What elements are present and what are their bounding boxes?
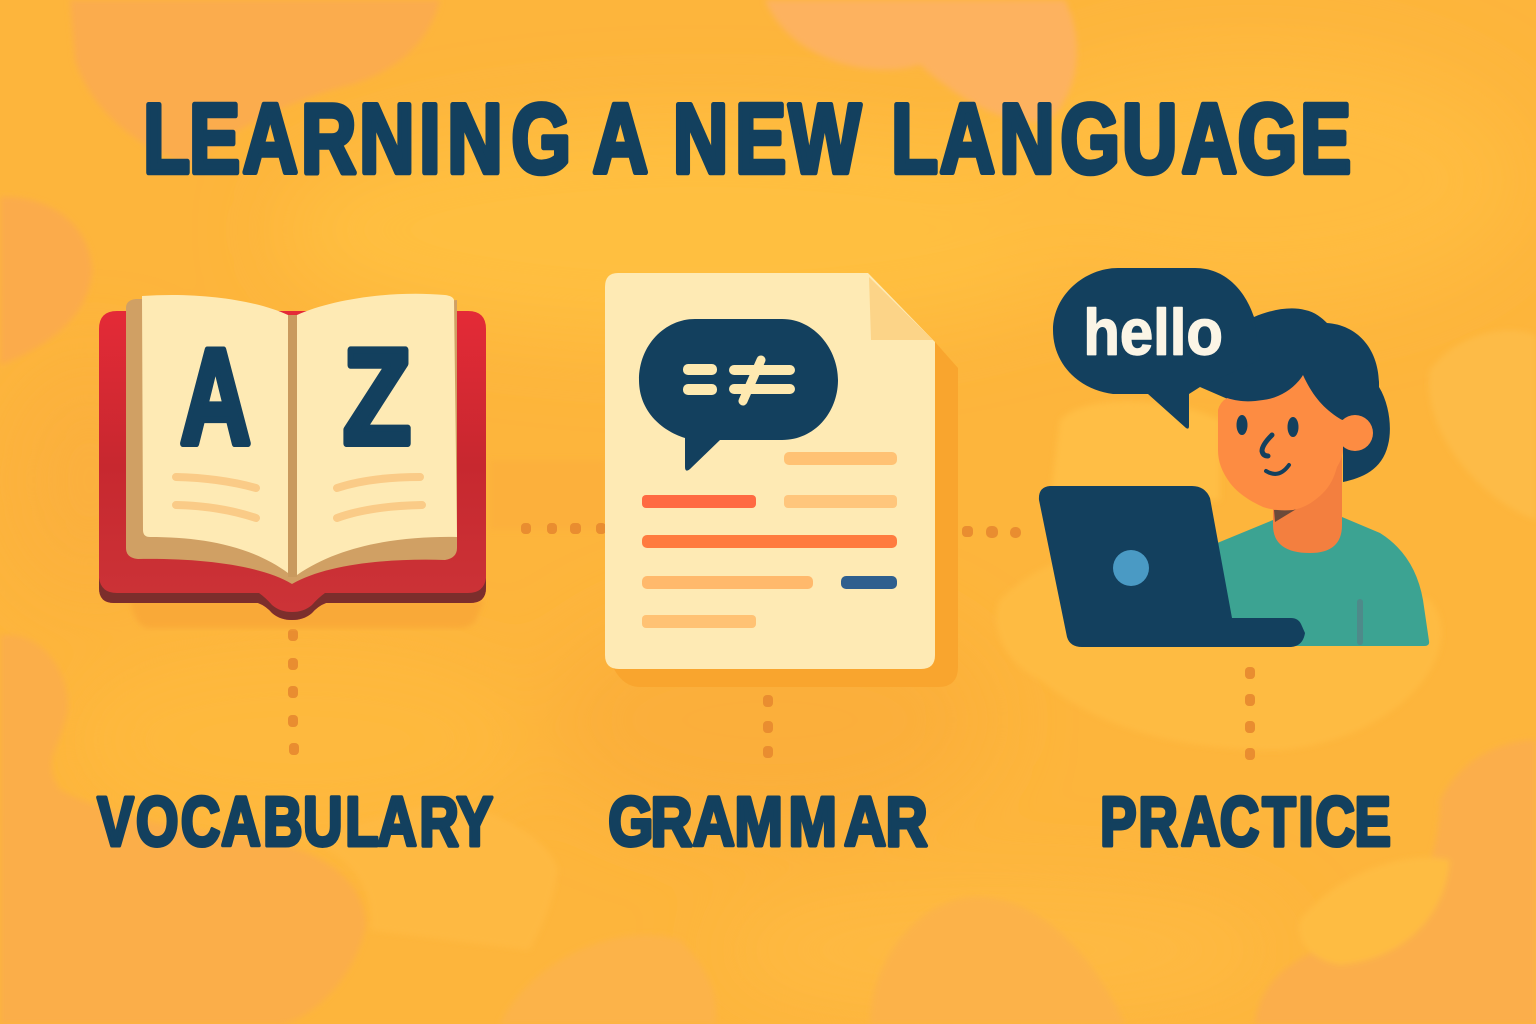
label: practice: PRACTICE bbox=[1100, 783, 1391, 861]
document text lines bbox=[642, 452, 897, 628]
laptop bbox=[1039, 486, 1305, 647]
icon: person with laptop bbox=[1039, 268, 1429, 647]
letter A: A bbox=[180, 322, 251, 473]
connector dots: document to laptop bbox=[962, 526, 1021, 538]
speech bubble: hello bbox=[1053, 268, 1260, 429]
letter Z: Z bbox=[343, 321, 411, 473]
page text lines bbox=[176, 477, 422, 518]
speech bubble with not-equal sign bbox=[639, 319, 838, 471]
icon: open book bbox=[99, 294, 486, 628]
shirt bbox=[1210, 517, 1429, 646]
icon: grammar document bbox=[605, 273, 958, 687]
nose and mouth bbox=[1262, 435, 1289, 474]
connector dots: book to vocabulary bbox=[288, 629, 299, 755]
title: LEARNING A NEW LANGUAGE bbox=[143, 83, 1351, 194]
eyes bbox=[1236, 415, 1298, 437]
connector dots: document to grammar bbox=[763, 695, 773, 758]
connector dots: laptop to practice bbox=[1245, 667, 1255, 760]
label: grammar: GRAMMAR bbox=[608, 782, 928, 861]
ear bbox=[1337, 415, 1373, 451]
connector dots: book to document bbox=[521, 523, 606, 534]
neck bbox=[1273, 440, 1342, 553]
face bbox=[1218, 375, 1343, 510]
speech bubble: hello: hello bbox=[1083, 296, 1223, 369]
hair bbox=[1200, 308, 1390, 482]
label: vocabulary: VOCABULARY bbox=[97, 783, 493, 861]
